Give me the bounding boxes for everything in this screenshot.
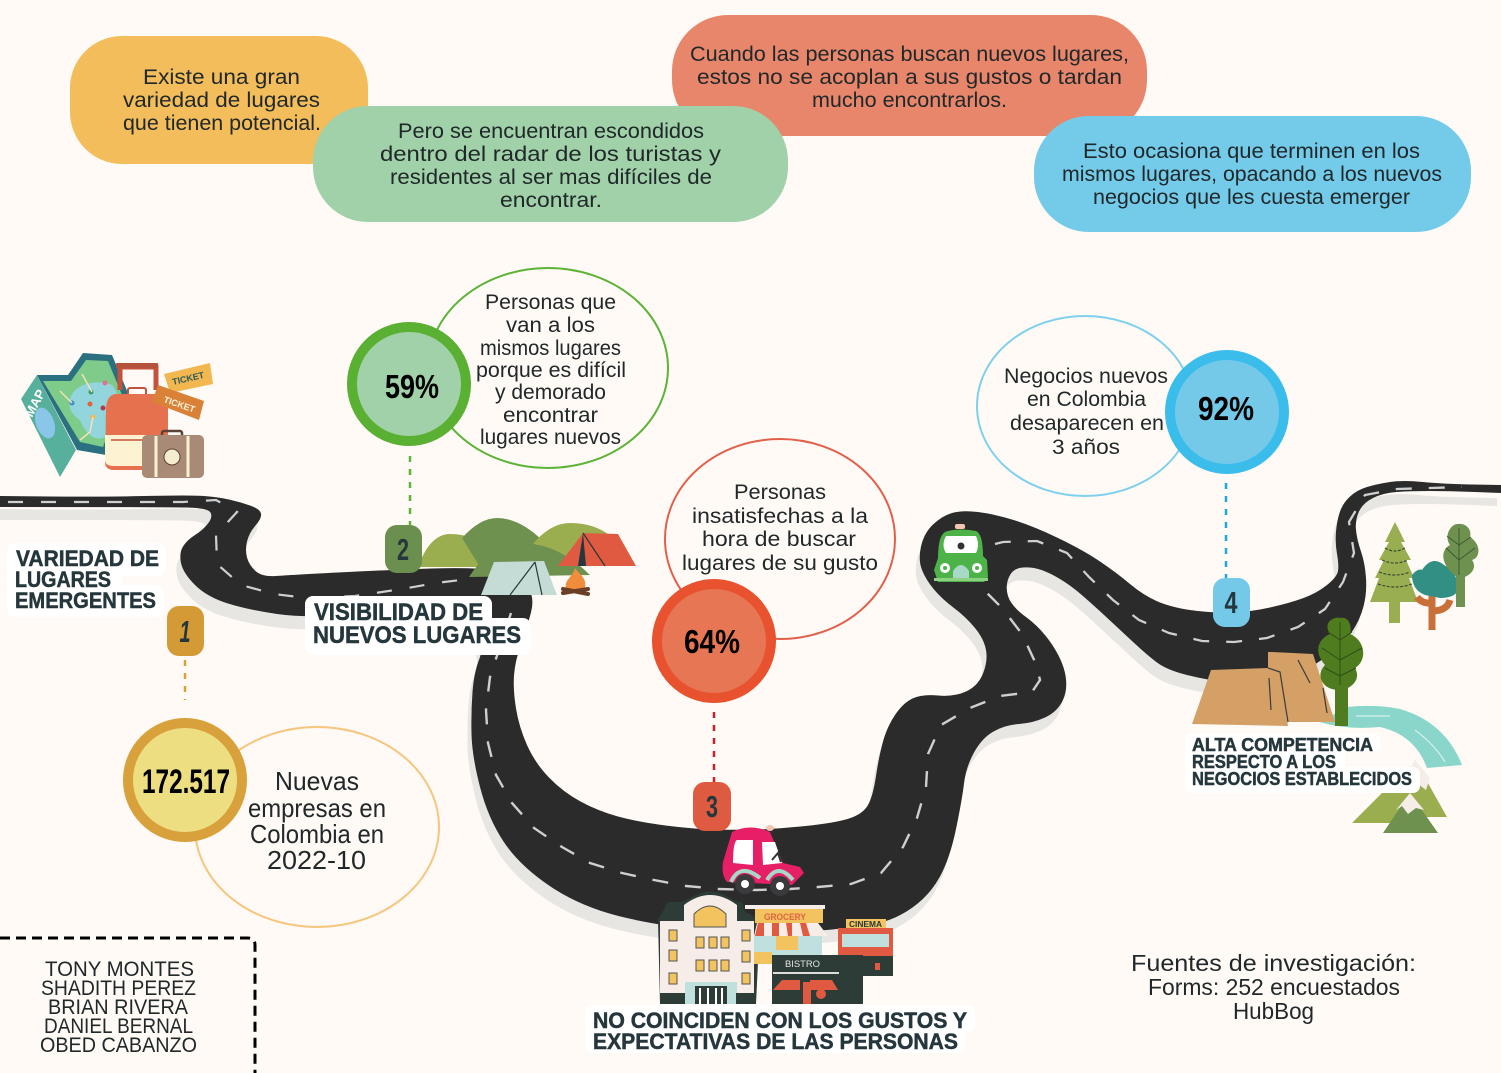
panel: green intro [313, 106, 788, 222]
text: red intro: mucho encontrarlos. [812, 89, 1007, 112]
text: yellow intro: que tienen potencial. [123, 112, 321, 135]
label: visibilidad de nuevos lugares [305, 596, 531, 655]
dashed connector 2 [409, 456, 411, 525]
stat circle 172.517 [128, 723, 242, 837]
icon: big green tree [1318, 618, 1363, 726]
badge 3: 3 [706, 789, 718, 824]
text: mismos lugares [476, 291, 626, 449]
badge 1: 1 [180, 614, 190, 649]
text: mismos lugares: van a los [506, 314, 595, 337]
road [0, 481, 1501, 946]
panel: yellow intro [70, 36, 368, 164]
text: personas insatisfechas: Personas [734, 481, 826, 504]
text: authors: DANIEL BERNAL [44, 1015, 193, 1038]
callout: mismos lugares [352, 268, 668, 468]
text: negocios nuevos: 3 años [1052, 436, 1120, 459]
badge 3 [693, 782, 731, 831]
text: nuevas empresas: Colombia en [250, 819, 384, 849]
text: personas insatisfechas: hora de buscar [702, 528, 856, 551]
text: personas insatisfechas: lugares de su gusto [682, 552, 878, 575]
icon: mountains [1352, 760, 1447, 833]
label: visibilidad de nuevos lugares: VISIBILIDAD DE [314, 599, 483, 626]
callout: nuevas empresas [128, 723, 439, 927]
text: personas insatisfechas: insatisfechas a la [692, 505, 868, 528]
stat circle 64% [657, 584, 771, 698]
icon: map, suitcases and tickets: MAP [21, 387, 48, 419]
text: blue intro: Esto ocasiona que terminen en los [1083, 140, 1420, 163]
label: no coinciden [585, 1005, 975, 1054]
stat circle 172.517: 172.517 [142, 763, 230, 801]
stat circle 64%: 64% [684, 623, 740, 660]
text: green intro: dentro del radar de los turistas y [380, 143, 722, 166]
stat circle 92%: 92% [1198, 390, 1254, 427]
text: mismos lugares: mismos lugares [480, 337, 621, 360]
text: authors: BRIAN RIVERA [48, 996, 188, 1019]
text: green intro: encontrar. [500, 189, 602, 212]
text: mismos lugares: y demorado [495, 381, 606, 404]
dashed connector 4 [1225, 483, 1227, 578]
icon: city buildings: GROCERY [764, 912, 806, 922]
label: alta competencia [1185, 733, 1420, 793]
text: green intro: residentes al ser mas difíciles de [390, 166, 712, 189]
text: negocios nuevos: Negocios nuevos [1004, 365, 1168, 388]
dashed connector 1 [184, 660, 186, 700]
icon: hills and camp tents [418, 518, 636, 595]
icon: green car [934, 524, 988, 582]
dashed connector 3 [713, 712, 715, 782]
panel: red intro [672, 15, 1147, 136]
text: authors: SHADITH PEREZ [41, 977, 196, 1000]
text: green intro: Pero se encuentran escondidos [398, 120, 704, 143]
text: green intro [380, 120, 722, 212]
icon: city buildings: CINEMA [849, 920, 882, 929]
icon: map, suitcases and tickets: TICKET [162, 394, 197, 415]
text: nuevas empresas: 2022-10 [267, 845, 366, 875]
icon: map, suitcases and tickets [21, 353, 213, 478]
text: sources: Fuentes de investigación: [1131, 950, 1416, 976]
text: mismos lugares: encontrar [503, 404, 598, 427]
label: visibilidad de nuevos lugares: NUEVOS LUGARES [313, 622, 521, 649]
text: authors [40, 958, 197, 1057]
text: negocios nuevos [1004, 365, 1168, 459]
text: mismos lugares: porque es difícil [476, 359, 626, 382]
text: personas insatisfechas [682, 481, 878, 575]
text: blue intro [1062, 140, 1442, 209]
panel: blue intro [1034, 116, 1471, 232]
credits box [0, 938, 255, 1073]
label: variedad de lugares emergentes: LUGARES [15, 567, 111, 592]
stat circle 92% [1170, 355, 1284, 469]
label: no coinciden: NO COINCIDEN CON LOS GUSTOS Y [593, 1008, 967, 1033]
text: blue intro: mismos lugares, opacando a los nuevos [1062, 163, 1442, 186]
text: red intro [690, 43, 1129, 112]
text: mismos lugares: lugares nuevos [480, 426, 621, 449]
text: authors: TONY MONTES [45, 958, 194, 981]
icon: river [1320, 706, 1462, 768]
text: mismos lugares: Personas que [485, 291, 616, 314]
text: nuevas empresas: empresas en [248, 793, 386, 823]
label: alta competencia: RESPECTO A LOS [1192, 752, 1336, 772]
text: nuevas empresas [248, 766, 386, 875]
label: variedad de lugares emergentes: VARIEDAD DE [16, 546, 159, 571]
text: sources: HubBog [1233, 998, 1314, 1024]
text: yellow intro: Existe una gran [143, 66, 300, 89]
text: yellow intro [123, 66, 321, 135]
label: variedad de lugares emergentes: EMERGENTES [15, 588, 156, 613]
text: negocios nuevos: desaparecen en [1010, 412, 1164, 435]
badge 2 [385, 525, 422, 573]
badge 4: 4 [1224, 585, 1238, 620]
text: red intro: Cuando las personas buscan nuevos lugares, [690, 43, 1129, 66]
text: sources: Forms: 252 encuestados [1148, 974, 1400, 1000]
icon: city buildings [658, 892, 893, 1004]
icon: map, suitcases and tickets: TICKET [171, 370, 206, 387]
icon: mesa rocks [1192, 652, 1335, 726]
text: negocios nuevos: en Colombia [1027, 388, 1146, 411]
icon: pink car [722, 825, 804, 896]
callout: negocios nuevos [977, 316, 1284, 496]
badge 2: 2 [397, 532, 409, 567]
label: alta competencia: ALTA COMPETENCIA [1192, 735, 1373, 755]
badge 1 [167, 606, 204, 656]
callout: personas insatisfechas [657, 439, 895, 698]
label: variedad de lugares emergentes [7, 543, 166, 617]
text: nuevas empresas: Nuevas [275, 766, 359, 796]
stat circle 59% [352, 327, 466, 441]
label: no coinciden: EXPECTATIVAS DE LAS PERSONAS [593, 1029, 958, 1054]
badge 4 [1213, 578, 1250, 627]
label: alta competencia: NEGOCIOS ESTABLECIDOS [1192, 769, 1412, 789]
icon: city buildings: BISTRO [785, 959, 820, 969]
text: sources [1131, 950, 1416, 1024]
text: blue intro: negocios que les cuesta emerger [1093, 186, 1410, 209]
icon: trees [1370, 522, 1478, 630]
text: authors: OBED CABANZO [40, 1034, 197, 1057]
stat circle 59%: 59% [385, 368, 439, 405]
text: red intro: estos no se acoplan a sus gustos o tardan [697, 66, 1122, 89]
text: yellow intro: variedad de lugares [123, 89, 320, 112]
